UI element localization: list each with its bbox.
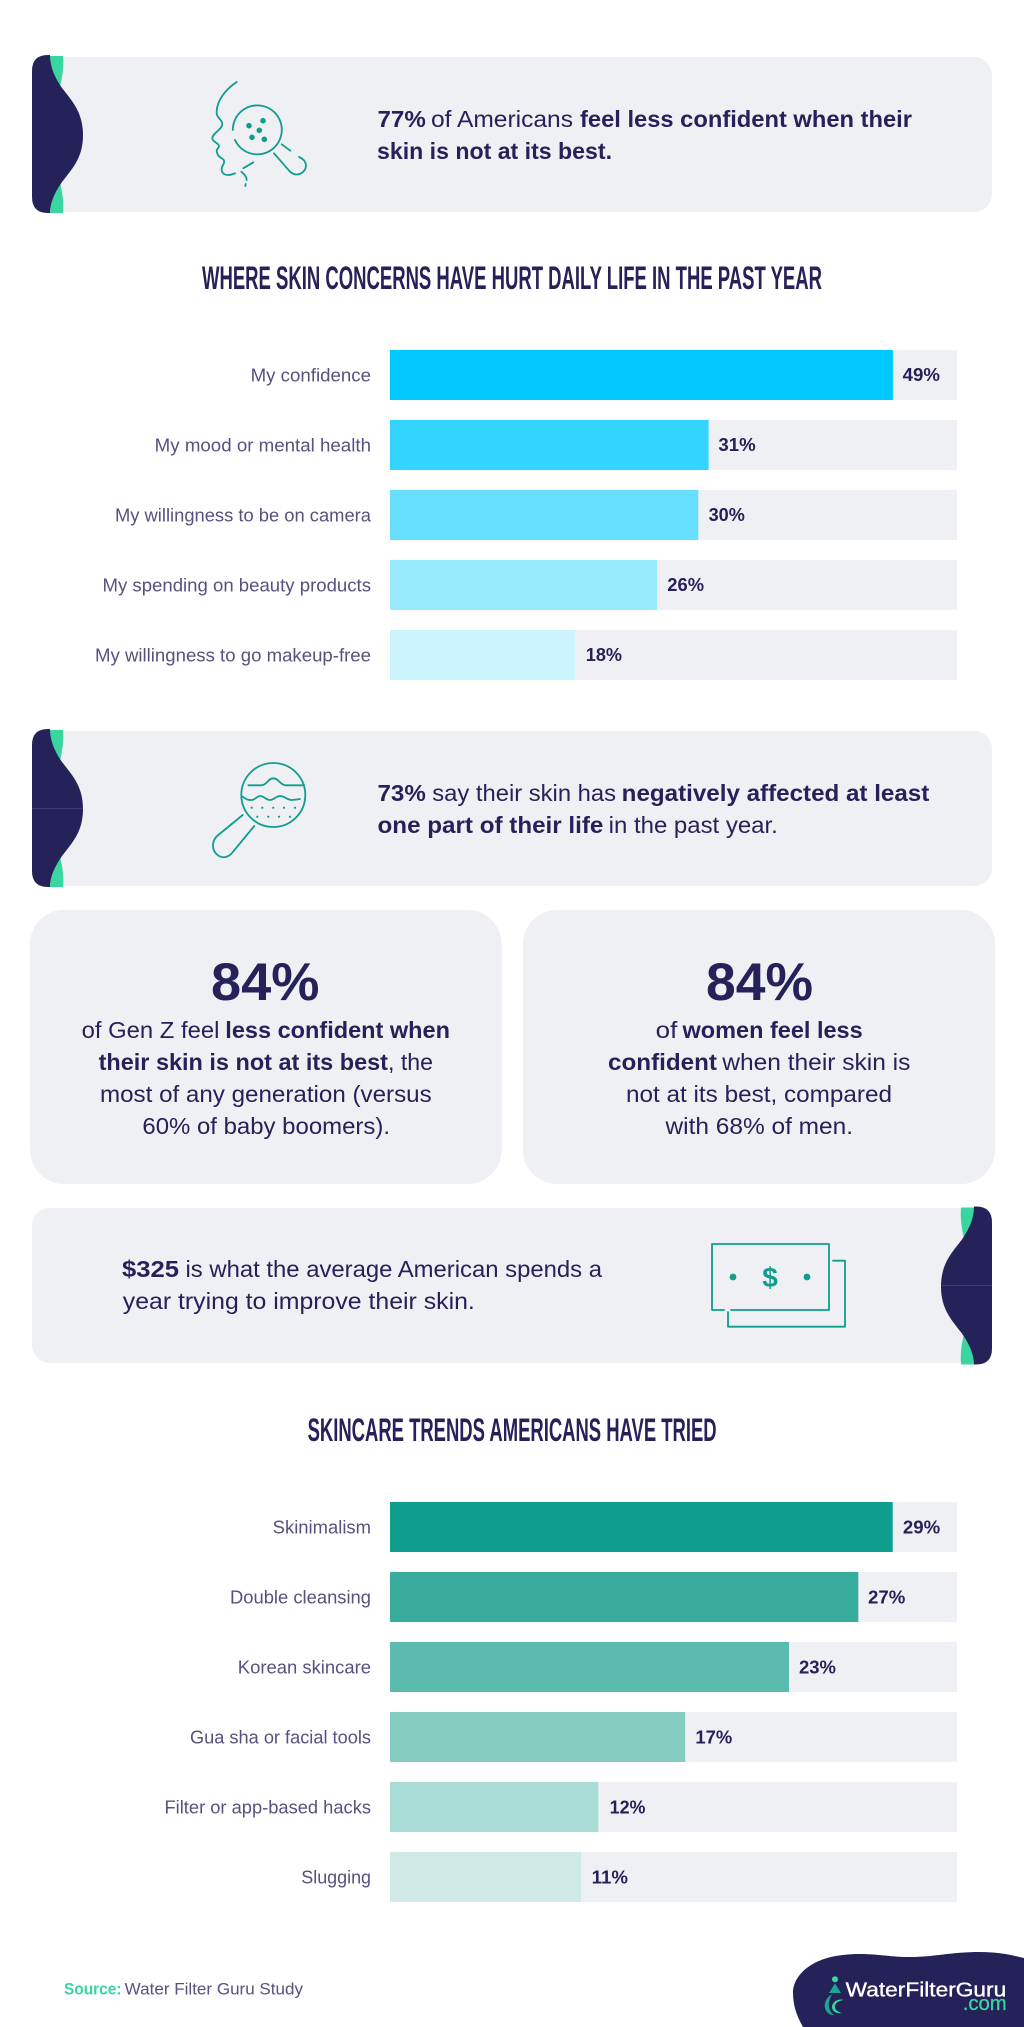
body text <box>82 1017 450 1139</box>
row: gua sha: 17% <box>695 1728 732 1748</box>
panel: 84% of women <box>523 910 995 1184</box>
callout text: of Americans <box>431 106 573 132</box>
logo: WaterFilterGuru: .com <box>963 1992 1007 2015</box>
callout text: 77% <box>378 106 426 132</box>
callout text: feel less confident when their <box>580 106 912 132</box>
body text: women feel less <box>681 1017 863 1043</box>
row: skinimalism <box>273 1502 957 1552</box>
row: makeup-free: My willingness to go makeup-free <box>95 646 371 666</box>
big number: 84% <box>706 953 813 1012</box>
row: mood or mental health: 31% <box>718 435 756 455</box>
body text: less confident when <box>225 1017 450 1043</box>
row: slugging: Slugging <box>301 1868 371 1888</box>
source line: Water Filter Guru Study <box>125 1979 303 1998</box>
row: skinimalism: Skinimalism <box>273 1518 371 1538</box>
row: spending on beauty products <box>102 560 957 610</box>
bar chart: skincare trends <box>164 1502 957 1902</box>
panel: $325 annual spend callout <box>32 1206 992 1364</box>
row: spending on beauty products: 26% <box>667 575 704 595</box>
panel: 77% confidence callout <box>32 55 992 213</box>
icon: dollar bills: $ <box>762 1262 778 1293</box>
body text: of Gen Z feel <box>82 1017 219 1043</box>
row: mood or mental health: My mood or mental health <box>155 436 371 456</box>
row: my confidence: 49% <box>903 365 940 385</box>
callout text <box>377 106 912 164</box>
row: filter or app hacks: 12% <box>610 1798 646 1818</box>
logo: WaterFilterGuru <box>793 1952 1024 2027</box>
callout text: in the past year. <box>609 812 778 838</box>
big number: 84% <box>211 953 319 1012</box>
icon: magnifying glass over skin layers <box>213 763 305 857</box>
row: willingness on camera: 30% <box>709 505 745 525</box>
callout text: 73% <box>378 780 426 806</box>
callout text: negatively affected at least <box>622 780 930 806</box>
body text: when their skin is <box>721 1049 910 1075</box>
row: double cleansing <box>230 1572 957 1622</box>
row: double cleansing: Double cleansing <box>230 1588 371 1608</box>
panel: 84% of Gen Z <box>30 910 502 1184</box>
row: makeup-free: 18% <box>586 645 622 665</box>
heading: skincare trends: SKINCARE TRENDS AMERICANS HAVE TRIED <box>308 1412 717 1448</box>
row: mood or mental health <box>155 420 957 470</box>
callout text: skin is not at its best. <box>377 138 612 164</box>
row: makeup-free <box>95 630 957 680</box>
row: gua sha: Gua sha or facial tools <box>190 1728 371 1748</box>
body text: not at its best, compared <box>626 1081 892 1107</box>
row: korean skincare: 23% <box>799 1658 836 1678</box>
callout text: year trying to improve their skin. <box>123 1288 475 1314</box>
body text: most of any generation (versus <box>100 1081 432 1107</box>
wave decoration right <box>941 1206 992 1364</box>
source line: Source: <box>64 1979 122 1998</box>
row: slugging <box>301 1852 957 1902</box>
row: korean skincare: Korean skincare <box>238 1658 371 1678</box>
callout text: say their skin has <box>432 780 616 806</box>
wave decoration left <box>32 729 83 887</box>
row: gua sha <box>190 1712 957 1762</box>
row: slugging: 11% <box>592 1868 628 1888</box>
callout text <box>378 780 930 838</box>
logo: WaterFilterGuru: WaterFilterGuru <box>846 1979 1006 2002</box>
callout text: $325 <box>122 1256 179 1282</box>
body text: of <box>656 1017 678 1043</box>
bar chart: daily life impact <box>95 350 957 680</box>
row: filter or app hacks: Filter or app-based hacks <box>164 1798 371 1818</box>
callout text <box>122 1256 602 1314</box>
row: willingness on camera: My willingness to be on camera <box>115 506 372 526</box>
row: double cleansing: 27% <box>868 1588 905 1608</box>
row: my confidence: My confidence <box>251 366 371 386</box>
row: my confidence <box>251 350 957 400</box>
callout text: is what the average American spends a <box>186 1256 602 1282</box>
callout text: one part of their life <box>378 812 603 838</box>
logo mark <box>825 1976 844 2015</box>
body text: their skin is not at its best <box>99 1049 388 1075</box>
panel: 73% negatively affected callout <box>32 729 992 887</box>
row: skinimalism: 29% <box>903 1518 940 1538</box>
body text: with 68% of men. <box>664 1113 853 1139</box>
icon: dollar bills <box>712 1244 845 1327</box>
body text: , the <box>388 1049 433 1075</box>
wave decoration left <box>32 55 83 213</box>
body text: 60% of baby boomers). <box>142 1113 390 1139</box>
icon: face with magnifying glass <box>212 82 306 186</box>
body text <box>608 1017 910 1139</box>
body text: confident <box>608 1049 717 1075</box>
row: spending on beauty products: My spending on beauty products <box>102 576 371 596</box>
row: willingness on camera <box>115 490 957 540</box>
row: korean skincare <box>238 1642 957 1692</box>
row: filter or app hacks <box>164 1782 957 1832</box>
